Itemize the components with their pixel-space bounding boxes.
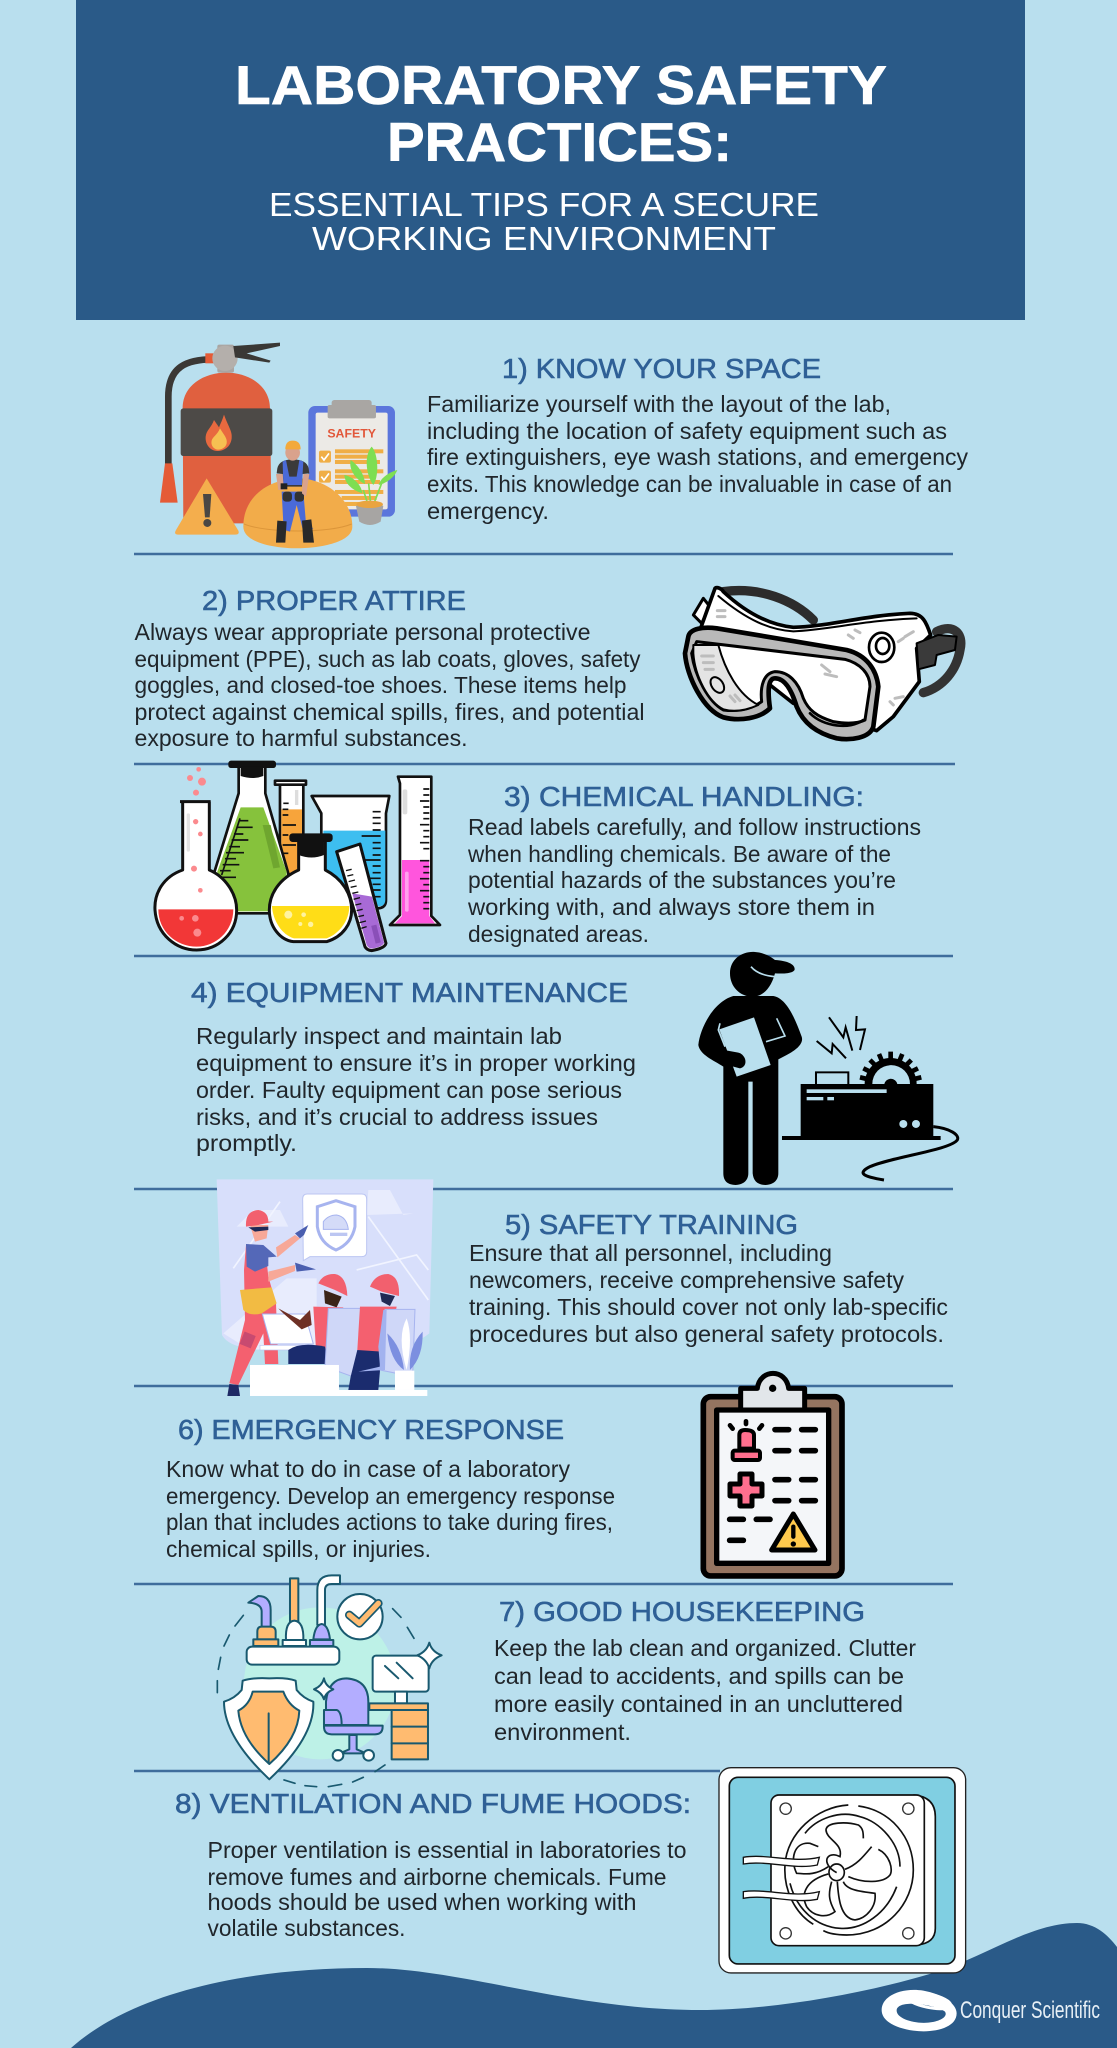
section 1 text: including the location of safety equipment such as — [427, 418, 947, 444]
section 5 text: procedures but also general safety protocols. — [469, 1321, 944, 1347]
header banner — [76, 0, 1025, 320]
section 7 text: can lead to accidents, and spills can be — [494, 1663, 904, 1689]
section 8 text: Proper ventilation is essential in laboratories to — [208, 1837, 686, 1863]
icon: chemistry flasks — [155, 761, 440, 951]
section 5 text: Ensure that all personnel, including — [469, 1240, 832, 1266]
section 2 text: exposure to harmful substances. — [134, 725, 468, 751]
icon: fire extinguisher, worker and safety clipboard: SAFETY — [327, 426, 377, 440]
section 7 text: Keep the lab clean and organized. Clutter — [494, 1635, 916, 1661]
icon: safety goggles — [685, 588, 961, 739]
section 6 text: chemical spills, or injuries. — [166, 1536, 431, 1562]
section 2 text: Always wear appropriate personal protective — [134, 619, 590, 645]
section 4 text: order. Faulty equipment can pose serious — [196, 1077, 622, 1103]
section 3 text: designated areas. — [468, 921, 649, 947]
icon: ventilation fan — [719, 1768, 966, 1973]
section 4 text — [196, 1023, 636, 1156]
section 1 text — [427, 391, 968, 524]
section 8 text: hoods should be used when working with — [208, 1889, 636, 1915]
section 3 text: when handling chemicals. Be aware of the — [467, 841, 891, 867]
title: LABORATORY SAFETY — [235, 54, 887, 116]
section 8 text: volatile substances. — [208, 1915, 406, 1941]
section 2 text: protect against chemical spills, fires, and potential — [134, 699, 644, 725]
section 5 text: training. This should cover not only lab-specific — [469, 1294, 948, 1320]
section 3 text: potential hazards of the substances you’re — [468, 867, 896, 893]
illustration: safety trainer and trainees — [217, 1179, 433, 1396]
section 3 text: working with, and always store them in — [467, 894, 875, 920]
section 4 text: risks, and it’s crucial to address issues — [196, 1104, 598, 1130]
section 7 text — [494, 1635, 916, 1745]
subtitle: ESSENTIAL TIPS FOR A SECURE — [269, 186, 819, 223]
section 6 text — [166, 1456, 615, 1562]
section 3 text: Read labels carefully, and follow instructions — [468, 814, 921, 840]
icon: organised workspace — [217, 1575, 442, 1787]
section 1 heading: 1) KNOW YOUR SPACE — [502, 353, 821, 384]
icon: technician inspecting machine — [698, 952, 958, 1185]
section 7 text: more easily contained in an uncluttered — [494, 1691, 903, 1717]
subtitle — [269, 186, 819, 257]
bottom wave — [71, 1923, 1117, 2048]
section 6 text: plan that includes actions to take during fires, — [166, 1509, 613, 1535]
section 7 text: environment. — [494, 1719, 631, 1745]
icon: emergency checklist clipboard — [703, 1373, 842, 1576]
section 2 heading: 2) PROPER ATTIRE — [202, 585, 466, 616]
section 8 text — [208, 1837, 686, 1941]
section 6 text: Know what to do in case of a laboratory — [166, 1456, 570, 1482]
section 4 text: equipment to ensure it’s in proper working — [196, 1050, 636, 1076]
section 5 text — [469, 1240, 948, 1347]
logo: Conquer Scientific — [882, 1989, 1100, 2031]
section 8 text: remove fumes and airborne chemicals. Fume — [208, 1864, 666, 1890]
section 3 heading: 3) CHEMICAL HANDLING: — [504, 781, 864, 812]
title — [235, 54, 887, 173]
section 1 text: emergency. — [427, 498, 549, 524]
section 1 text: Familiarize yourself with the layout of the lab, — [427, 391, 891, 417]
section 3 text — [467, 814, 921, 947]
icon: fire extinguisher, worker and safety clipboard — [160, 343, 397, 548]
section 4 text: Regularly inspect and maintain lab — [196, 1023, 562, 1049]
section 6 heading: 6) EMERGENCY RESPONSE — [178, 1414, 564, 1445]
section 2 text: goggles, and closed-toe shoes. These items help — [134, 672, 626, 698]
section 7 heading: 7) GOOD HOUSEKEEPING — [499, 1596, 865, 1627]
section 4 heading: 4) EQUIPMENT MAINTENANCE — [191, 977, 628, 1008]
section 6 text: emergency. Develop an emergency response — [166, 1483, 615, 1509]
section 4 text: promptly. — [196, 1130, 297, 1156]
section 5 text: newcomers, receive comprehensive safety — [469, 1267, 904, 1293]
section 2 text — [134, 619, 644, 751]
logo mark — [882, 1989, 957, 2031]
section 5 heading: 5) SAFETY TRAINING — [505, 1209, 798, 1240]
section 1 text: fire extinguishers, eye wash stations, and emergency — [427, 444, 968, 470]
title: PRACTICES: — [387, 111, 732, 173]
subtitle: WORKING ENVIRONMENT — [312, 220, 776, 257]
section 8 heading: 8) VENTILATION AND FUME HOODS: — [175, 1788, 691, 1819]
section 1 text: exits. This knowledge can be invaluable in case of an — [427, 471, 952, 497]
section 2 text: equipment (PPE), such as lab coats, gloves, safety — [134, 646, 641, 672]
